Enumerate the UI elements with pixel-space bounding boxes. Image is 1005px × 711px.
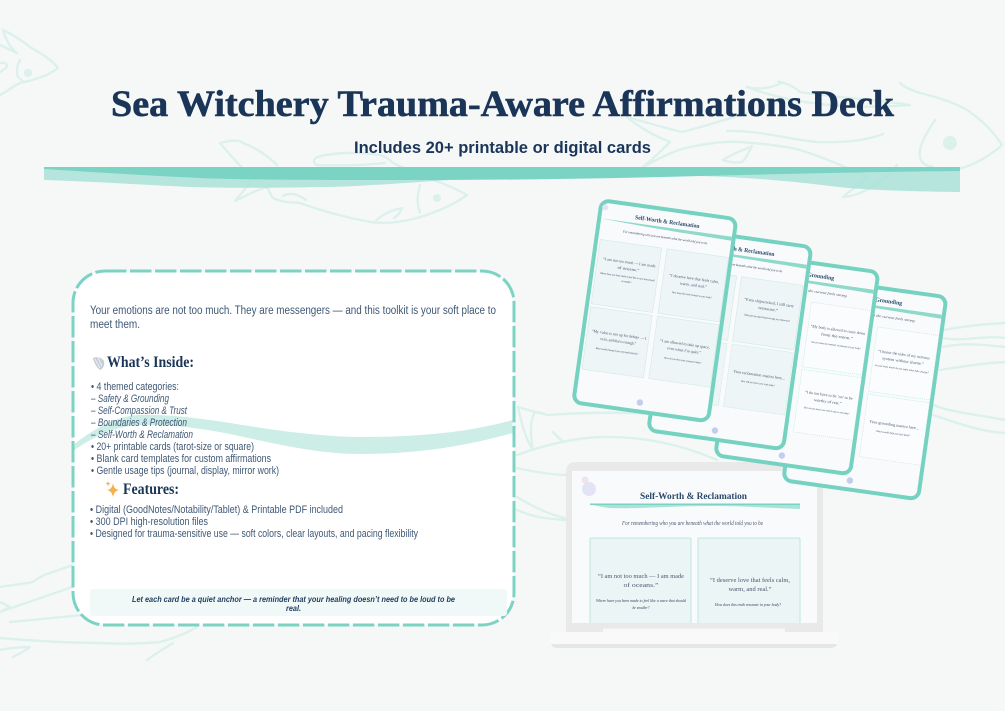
intro text: Your emotions are not too much. They are messengers — and this toolkit is your soft place to xyxy=(90,305,496,317)
list: contents: • Gentle usage tips (journal, display, mirror work) xyxy=(91,465,279,477)
list: features: • Digital (GoodNotes/Notability/Tablet) & Printable PDF included xyxy=(90,504,343,516)
screen card 1 xyxy=(590,538,691,623)
tablet 3: safety and grounding xyxy=(715,253,878,474)
screen card 1: Where have you been made to feel like a wave that should xyxy=(596,598,687,603)
tablet 2: self-worth and reclamation: “Even shipwrecked, I still carry xyxy=(744,296,794,309)
screen card 2: How does this truth resonate in your body? xyxy=(714,602,781,607)
tablet 1: self-worth and reclamation: “My value is not up for debate — I xyxy=(592,328,647,341)
tablet 1: self-worth and reclamation: even when I’m quiet.” xyxy=(667,345,702,355)
tablet 1: self-worth and reclamation xyxy=(573,200,736,421)
tablet 1: self-worth and reclamation: “I am not too much — I am made xyxy=(603,256,656,268)
tablet 2: self-worth and reclamation xyxy=(648,228,811,449)
tablet 4: safety and grounding: Safety & Grounding xyxy=(852,294,902,307)
callout: real. xyxy=(286,604,301,613)
tablet 4: safety and grounding: “I honor the tides of my nervous xyxy=(878,348,931,361)
tablet 4: safety and grounding: Your grounding mantra here... xyxy=(869,419,919,431)
tablet 1: self-worth and reclamation: Where have you been made to feel like a wave that should xyxy=(600,272,655,282)
tablet 1: self-worth and reclamation: exist, and that is enough.” xyxy=(600,336,637,347)
subtitle: Includes 20+ printable or digital cards xyxy=(354,138,651,157)
tablet 1: self-worth and reclamation: of oceans.” xyxy=(617,265,640,273)
icon: bubble xyxy=(582,476,596,496)
icon: sparkles xyxy=(106,481,119,497)
panel border xyxy=(73,271,514,625)
screen heading: Self-Worth & Reclamation xyxy=(640,492,748,502)
tablet 4: safety and grounding: Grounding myself when the current feels strong xyxy=(835,308,915,323)
screen subtitle: For remembering who you are beneath what the world told you to be xyxy=(621,521,763,527)
screen card 1: be smaller? xyxy=(632,605,650,610)
intro text xyxy=(90,305,496,331)
heading: what's inside: What’s Inside: xyxy=(107,354,194,371)
laptop base xyxy=(550,632,838,648)
tablet 2: self-worth and reclamation: treasure.” xyxy=(758,305,779,313)
icon: shell xyxy=(93,357,104,370)
list: features: • Designed for trauma-sensitive use — soft colors, clear layouts, and pacing flexibility xyxy=(90,528,418,540)
tablet 4: safety and grounding: What would help you feel held? xyxy=(876,430,911,438)
list: contents: – Boundaries & Protection xyxy=(90,417,187,429)
tablet 3: safety and grounding: worthy of rest.” xyxy=(814,397,842,406)
tablet 4: safety and grounding: system without shame.” xyxy=(882,355,924,366)
tablet 1: self-worth and reclamation: be smaller? xyxy=(621,280,632,284)
tablet 1: self-worth and reclamation: What would change if you truly believed this? xyxy=(595,347,639,356)
screen card 2: warm, and real.” xyxy=(728,586,772,593)
tablet 2: self-worth and reclamation: How will you honor your truth today? xyxy=(740,380,776,388)
title: Sea Witchery Trauma-Aware Affirmations Deck xyxy=(111,84,894,125)
tablet 2: self-worth and reclamation: What part has stayed intact through your shipwreck? xyxy=(744,314,791,323)
list: contents: – Safety & Grounding xyxy=(90,393,169,405)
screen card 2: “I deserve love that feels calm, xyxy=(710,577,790,584)
laptop mockup xyxy=(550,462,838,648)
screen wave line xyxy=(590,504,800,505)
tablet 1: self-worth and reclamation: “I am allowed to take up space, xyxy=(660,338,710,351)
tablet 1: self-worth and reclamation: For remembering who you are beneath what the world told you to be xyxy=(622,229,708,245)
wave banner xyxy=(44,167,960,192)
tablet 1: self-worth and reclamation: warm, and real.” xyxy=(679,280,707,290)
screen card 1: “I am not too much — I am made xyxy=(598,573,684,580)
tablet 2: self-worth and reclamation: Your reclamation mantra here... xyxy=(733,369,785,381)
list: contents: • 20+ printable cards (tarot-size or square) xyxy=(91,441,254,453)
tablet 2: self-worth and reclamation: Self-Worth & Reclamation xyxy=(710,243,775,258)
tablet 3: safety and grounding: from the storm.” xyxy=(821,331,854,341)
screen wave xyxy=(590,504,800,509)
tablet 2: self-worth and reclamation: For remembering who you are beneath what the world told you to be xyxy=(697,257,783,273)
callout xyxy=(90,589,507,616)
laptop screen xyxy=(572,471,817,623)
tablet 3: safety and grounding: How can you honor your need to stop or rest today? xyxy=(803,406,850,416)
tablet 3: safety and grounding: Grounding myself when the current feels strong xyxy=(767,283,847,298)
tablet 1: self-worth and reclamation: How do you show your presence today? xyxy=(663,356,702,365)
screen card 1: of oceans.” xyxy=(624,582,659,589)
list: contents xyxy=(90,381,279,477)
tablet 1: self-worth and reclamation: Self-Worth & Reclamation xyxy=(635,215,700,230)
tablet 4: safety and grounding xyxy=(783,278,946,499)
tablet 3: safety and grounding: “My body is allowed to come down xyxy=(810,323,866,336)
laptop frame xyxy=(566,462,823,632)
list: contents: – Self-Compassion & Trust xyxy=(90,405,188,417)
tablet 1: self-worth and reclamation: How does this truth resonate in your body? xyxy=(671,291,713,300)
tablet 4: safety and grounding: In your body where do you settle when tides change? xyxy=(874,364,930,375)
heading: features: Features: xyxy=(123,481,179,498)
panel wave xyxy=(74,415,512,454)
callout: Let each card be a quiet anchor — a reminder that your healing doesn’t need to be loud to be xyxy=(132,595,456,604)
tablet 3: safety and grounding: “I do not have to be ‘on’ to be xyxy=(805,389,853,401)
list: contents: • 4 themed categories: xyxy=(91,381,179,393)
list: features: • 300 DPI high-resolution files xyxy=(90,516,208,528)
tablet 3: safety and grounding: Safety & Grounding xyxy=(784,269,834,282)
list: contents: • Blank card templates for custom affirmations xyxy=(91,453,271,465)
tablet 3: safety and grounding: Can you sense the container of calmness in your body? xyxy=(811,341,861,351)
list: features xyxy=(90,504,418,540)
tablet 1: self-worth and reclamation: “I deserve love that feels calm, xyxy=(669,272,719,285)
list: contents: – Self-Worth & Reclamation xyxy=(90,429,193,441)
panel: what's inside xyxy=(73,271,514,625)
intro text: meet them. xyxy=(90,319,140,331)
laptop notch xyxy=(603,628,785,632)
screen card 2 xyxy=(698,538,800,623)
